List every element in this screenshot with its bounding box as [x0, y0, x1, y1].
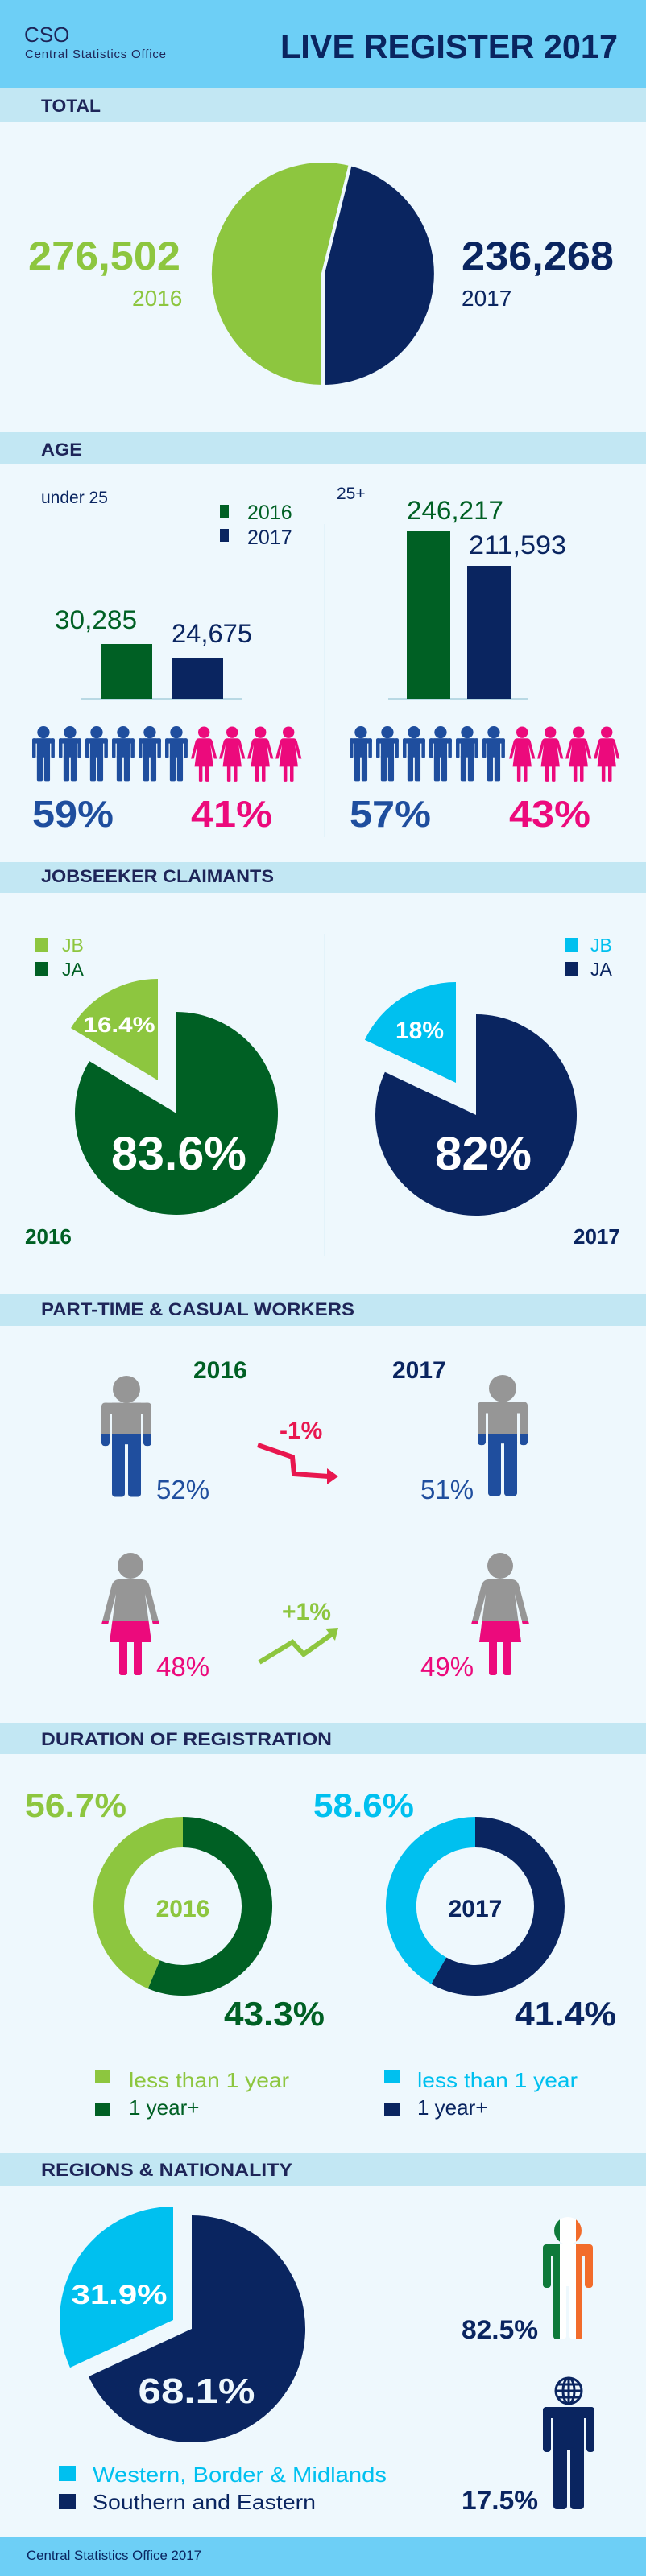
legend duration 2016: less than 1 year: [129, 2068, 289, 2092]
donut 2016: [109, 1832, 257, 1980]
total 2017: 236,268: [462, 233, 614, 279]
footer: Central Statistics Office 2017: [27, 2548, 201, 2563]
under 25 bar chart: under 25: [41, 489, 108, 507]
section band: jobseeker: [0, 862, 646, 893]
logo text: CSO: [24, 23, 69, 47]
52%: 52%: [156, 1475, 209, 1505]
pie 2017: 18%: [395, 1018, 444, 1044]
pie 2017: [365, 982, 577, 1216]
section band: duration: [0, 1723, 646, 1754]
year headers: [193, 1357, 446, 1384]
legend 2017: JA: [590, 959, 612, 980]
year 2016: 2016: [25, 1224, 72, 1249]
total 2017: [462, 233, 614, 311]
year headers: 2016: [193, 1357, 247, 1384]
man 2016: [101, 1376, 151, 1496]
legend 2016: JA: [62, 959, 84, 980]
total pie: [210, 161, 436, 386]
section band: age: AGE: [41, 440, 82, 460]
age percentages: 43%: [509, 793, 590, 835]
regions legend: Southern and Eastern: [93, 2490, 316, 2514]
17.5%: 17.5%: [462, 2486, 538, 2515]
legend 2017: [565, 935, 612, 980]
regions pie: 68.1%: [139, 2372, 255, 2411]
legend duration 2017: 1 year+: [417, 2095, 487, 2120]
49%: 49%: [420, 1652, 474, 1682]
section band: part-time: PART-TIME & CASUAL WORKERS: [41, 1299, 354, 1319]
age percentages: 59%: [32, 793, 114, 835]
age legend: 2017: [247, 526, 292, 549]
people icons 25+: [350, 726, 619, 782]
regions pie: [60, 2207, 305, 2442]
total 2017: 2017: [462, 286, 511, 311]
legend duration 2017: less than 1 year: [417, 2068, 578, 2092]
25+ bar chart: 25+: [337, 485, 366, 503]
footer: [0, 2537, 646, 2576]
regions legend: [59, 2462, 387, 2514]
section band: total: TOTAL: [41, 96, 101, 116]
82.5%: 82.5%: [462, 2315, 538, 2344]
icon: irish person: [543, 2217, 593, 2339]
legend duration 2016: 1 year+: [129, 2095, 199, 2120]
pie 2016: 83.6%: [111, 1128, 246, 1180]
title: LIVE REGISTER 2017: [280, 27, 618, 65]
total 2016: [28, 233, 182, 311]
year 2017: 2017: [574, 1224, 620, 1249]
51%: 51%: [420, 1475, 474, 1505]
section band: regions: REGIONS & NATIONALITY: [41, 2160, 292, 2180]
donut 2016 values: 43.3%: [224, 1995, 325, 2033]
woman 2016: [101, 1553, 159, 1675]
section band: regions: [0, 2153, 646, 2186]
section band: jobseeker: JOBSEEKER CLAIMANTS: [41, 866, 274, 886]
donut 2017: [401, 1832, 549, 1980]
man 2017: [478, 1375, 528, 1496]
donut 2017: 2017: [449, 1896, 502, 1922]
donut 2017 values: 41.4%: [515, 1995, 616, 2033]
age percentages: [32, 793, 590, 835]
section band: total: [0, 88, 646, 122]
age legend: [220, 502, 292, 549]
under 25 bar chart: 30,285: [55, 605, 137, 634]
donut 2016 values: [25, 1786, 325, 2033]
under 25 bar chart: [41, 489, 252, 699]
under 25 bar chart: 24,675: [172, 619, 252, 648]
total 2016: 2016: [132, 286, 182, 311]
total 2016: 276,502: [28, 233, 180, 279]
pie 2016: [71, 979, 278, 1215]
woman 2017: [471, 1553, 529, 1675]
donut 2017 values: 58.6%: [313, 1786, 414, 1824]
25+ bar chart: 211,593: [469, 530, 566, 559]
25+ bar chart: 246,217: [407, 496, 503, 525]
pie 2017: 82%: [435, 1128, 532, 1180]
legend 2017: JB: [590, 935, 612, 956]
section band: part-time: [0, 1294, 646, 1326]
logo text: Central Statistics Office: [25, 47, 166, 61]
donut 2016 values: 56.7%: [25, 1786, 126, 1824]
donut 2017 values: [313, 1786, 616, 2033]
icon: globe head: [556, 2378, 582, 2404]
48%: 48%: [156, 1652, 209, 1682]
arrow up: +1%: [282, 1599, 331, 1625]
arrow down: [258, 1418, 338, 1484]
regions legend: Western, Border & Midlands: [93, 2462, 387, 2487]
people icons under 25: [32, 726, 301, 782]
arrow down: -1%: [280, 1418, 322, 1444]
25+ bar chart: [337, 485, 566, 699]
year headers: 2017: [392, 1357, 446, 1384]
section band: duration: DURATION OF REGISTRATION: [41, 1729, 332, 1749]
age legend: 2016: [247, 502, 292, 524]
legend 2016: [35, 935, 84, 980]
legend duration 2016: [95, 2068, 289, 2120]
legend duration 2017: [384, 2068, 578, 2120]
donut 2016: 2016: [156, 1896, 209, 1922]
pie 2016: 16.4%: [84, 1013, 155, 1037]
header: [0, 0, 646, 88]
arrow up: [259, 1599, 338, 1662]
age percentages: 57%: [350, 793, 431, 835]
age percentages: 41%: [191, 793, 272, 835]
logo text: [24, 23, 166, 61]
icon: foreign national: [543, 2378, 594, 2509]
section band: age: [0, 432, 646, 464]
regions pie: 31.9%: [71, 2280, 168, 2310]
legend 2016: JB: [62, 935, 84, 956]
